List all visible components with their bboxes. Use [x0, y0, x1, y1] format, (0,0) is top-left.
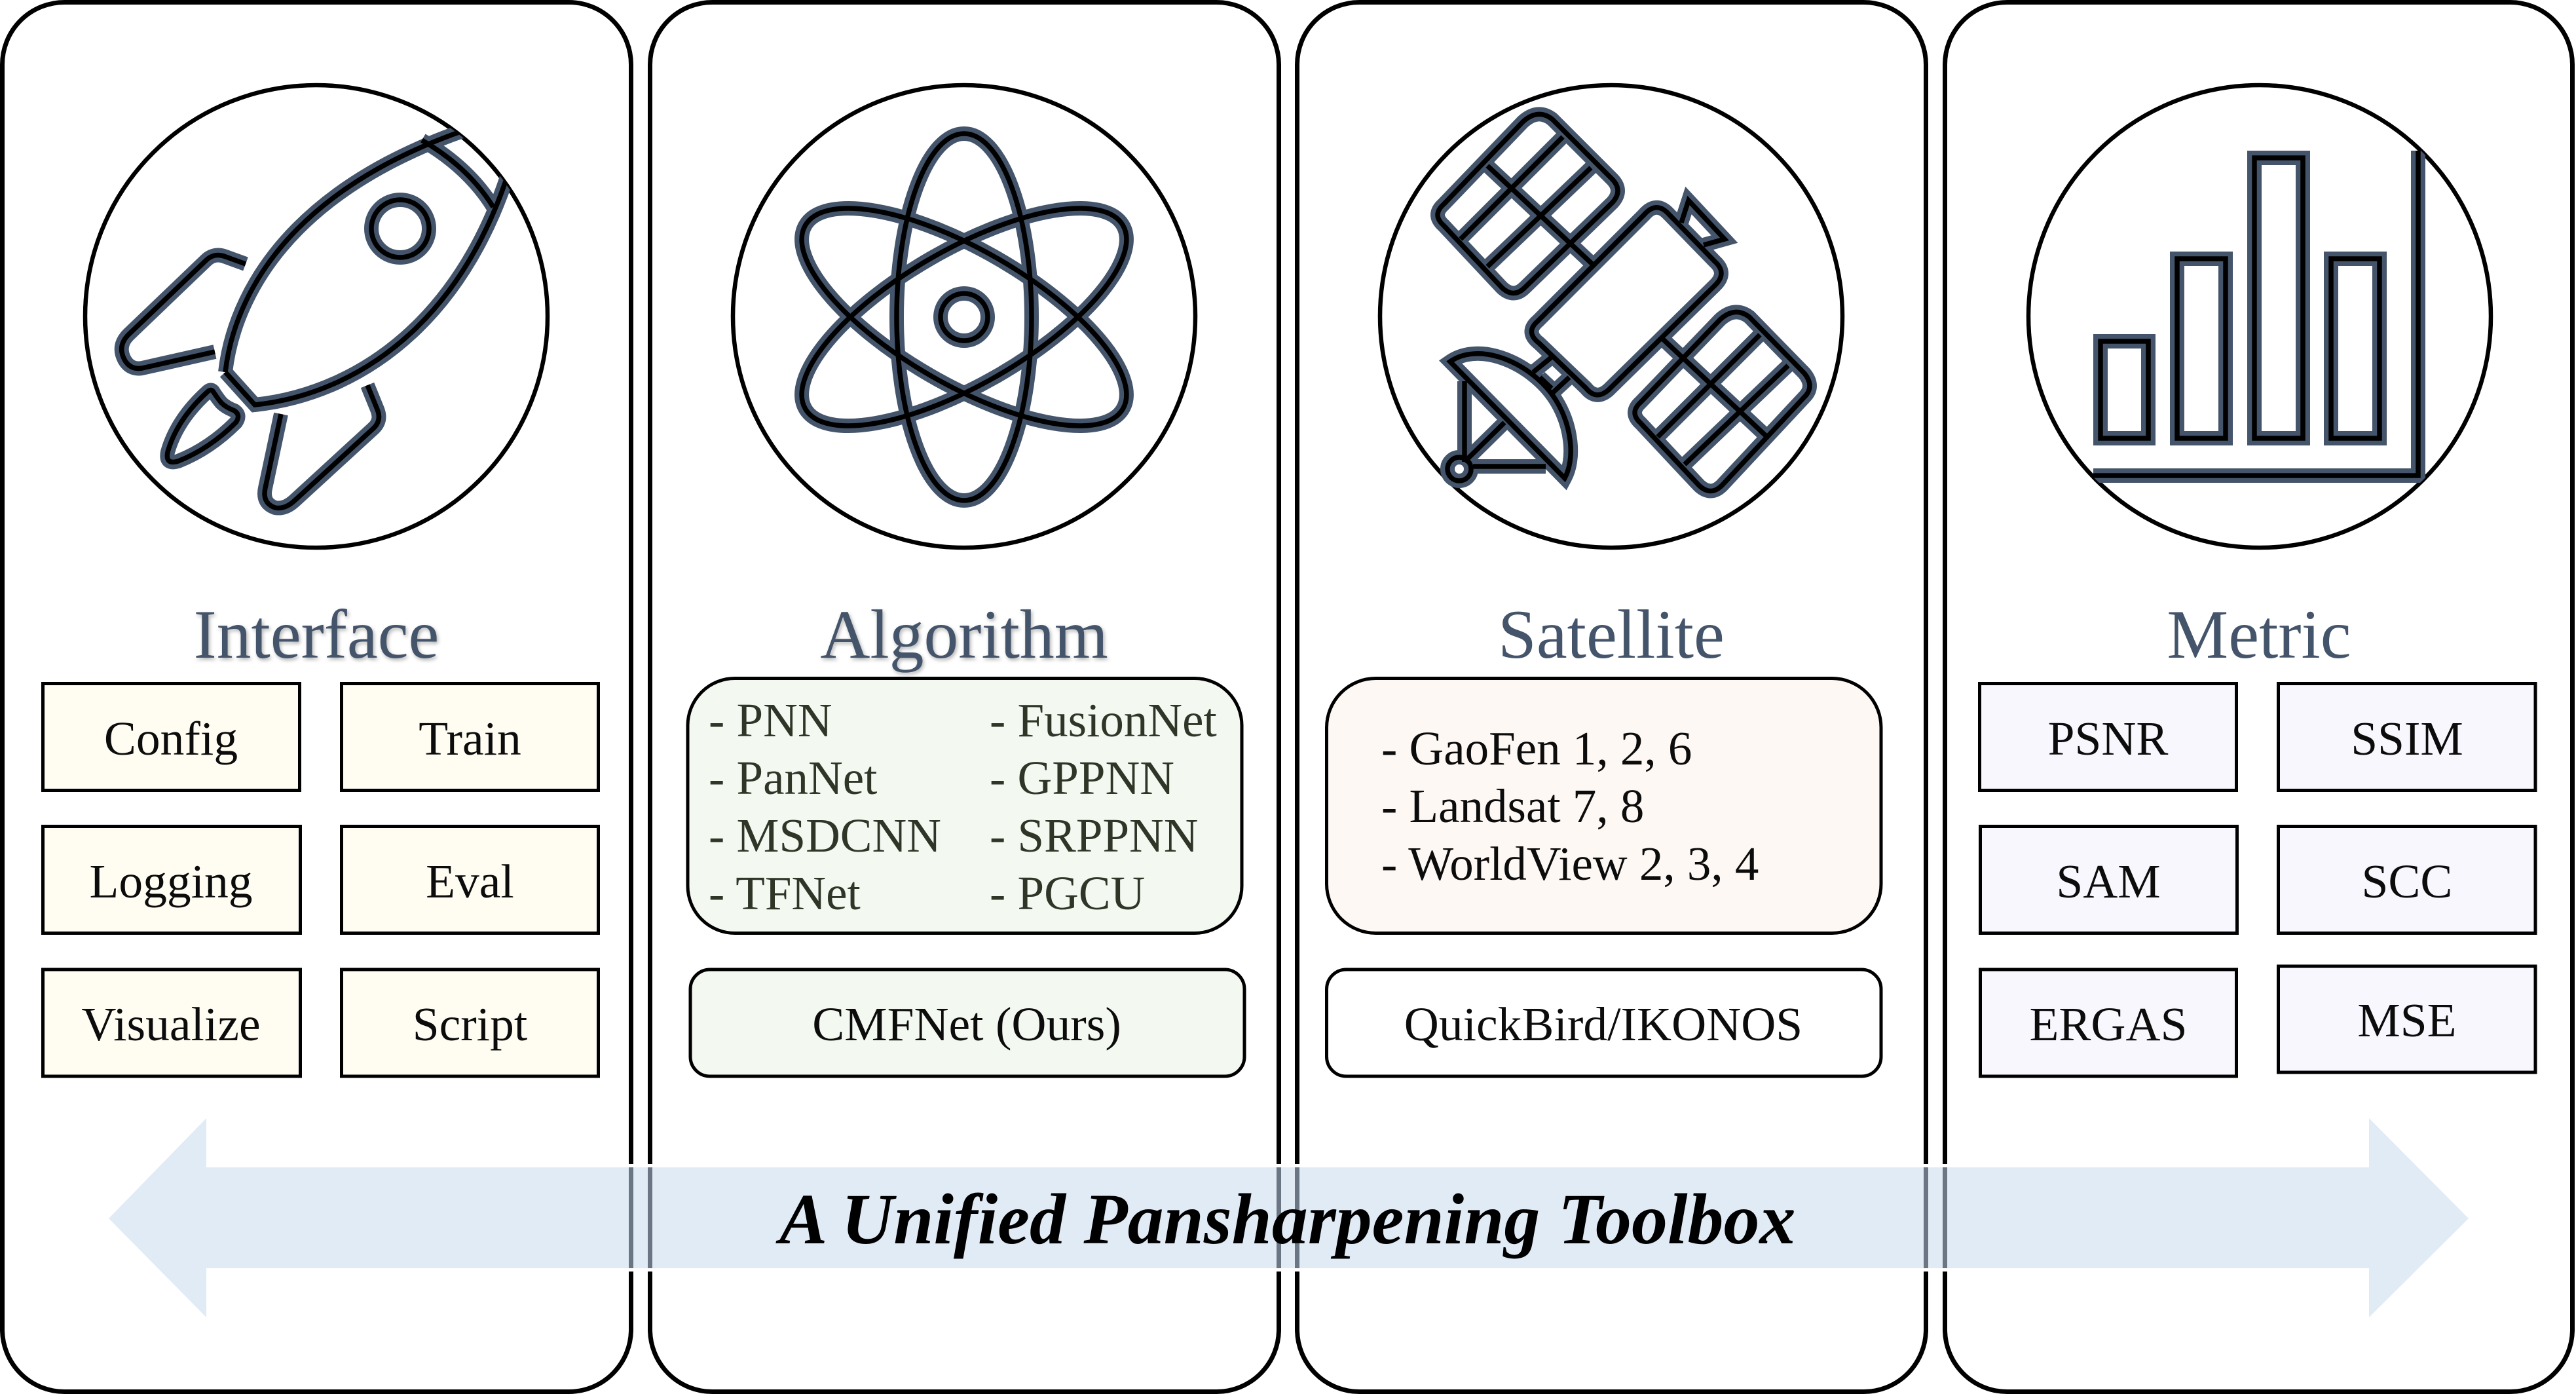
heading: satellite: Satellite	[1498, 596, 1725, 673]
box: SSIM: SSIM	[2351, 712, 2463, 765]
box: PSNR: PSNR	[2048, 712, 2168, 765]
box: QuickBird/IKONOS: QuickBird/IKONOS	[1404, 998, 1802, 1051]
panel: interface	[3, 3, 631, 1391]
box: algorithm list: - GPPNN	[990, 751, 1174, 804]
icon circle: interface	[85, 85, 548, 548]
box: algorithm list: - MSDCNN	[709, 809, 941, 862]
box: SAM: SAM	[2056, 855, 2161, 908]
box: PSNR	[1979, 684, 2236, 790]
box: satellite list: - WorldView 2, 3, 4	[1381, 837, 1759, 890]
box: visualize	[43, 970, 300, 1076]
box: MSE: MSE	[2357, 994, 2457, 1047]
box: algorithm list: - PGCU	[990, 867, 1145, 920]
box: satellite list: - GaoFen 1, 2, 6	[1381, 722, 1692, 775]
box: algorithm list: - TFNet	[709, 867, 861, 920]
box: eval	[342, 827, 599, 933]
panel: algorithm	[650, 3, 1279, 1391]
box: CMFNet: CMFNet (Ours)	[812, 998, 1121, 1051]
icon: rocket	[122, 113, 524, 508]
box: visualize: Visualize	[81, 998, 261, 1051]
icon: satellite	[1438, 114, 1810, 491]
box: ERGAS	[1981, 970, 2236, 1076]
box: logging	[43, 827, 300, 933]
heading: interface: Interface	[194, 596, 439, 673]
box: SAM	[1981, 827, 2237, 933]
heading: metric: Metric	[2167, 596, 2351, 673]
box: algorithm list: - PanNet	[709, 751, 877, 804]
box: SCC: SCC	[2362, 855, 2452, 908]
box: algorithm list	[688, 679, 1242, 933]
box: algorithm list: - FusionNet	[990, 694, 1217, 747]
box: script: Script	[413, 998, 527, 1051]
icon circle: algorithm	[733, 85, 1195, 548]
box: SSIM	[2278, 684, 2535, 790]
box: eval: Eval	[426, 855, 514, 908]
box: satellite list: - Landsat 7, 8	[1381, 780, 1644, 833]
box: QuickBird/IKONOS	[1327, 970, 1881, 1076]
panel: metric	[1945, 3, 2573, 1391]
box: SCC	[2278, 827, 2535, 933]
box: algorithm list: - SRPPNN	[990, 809, 1198, 862]
box: MSE	[2278, 966, 2535, 1072]
box: CMFNet	[690, 970, 1244, 1076]
box: train: Train	[419, 712, 521, 765]
icon: atom	[772, 134, 1157, 500]
box: algorithm list: - PNN	[709, 694, 832, 747]
banner title: A Unified Pansharpening Toolbox	[775, 1179, 1796, 1259]
box: satellite list	[1327, 679, 1881, 933]
arrow: double-headed banner	[109, 1118, 2469, 1317]
box: script	[342, 970, 599, 1076]
icon circle: satellite	[1380, 85, 1842, 548]
box: config: Config	[104, 712, 238, 765]
box: train	[342, 684, 599, 790]
box: ERGAS: ERGAS	[2030, 998, 2187, 1051]
panel: satellite	[1297, 3, 1926, 1391]
icon circle: metric	[2028, 85, 2491, 548]
box: logging: Logging	[89, 855, 253, 908]
heading: algorithm: Algorithm	[820, 596, 1108, 673]
box: config	[43, 684, 300, 790]
icon: bar chart	[2093, 151, 2418, 476]
